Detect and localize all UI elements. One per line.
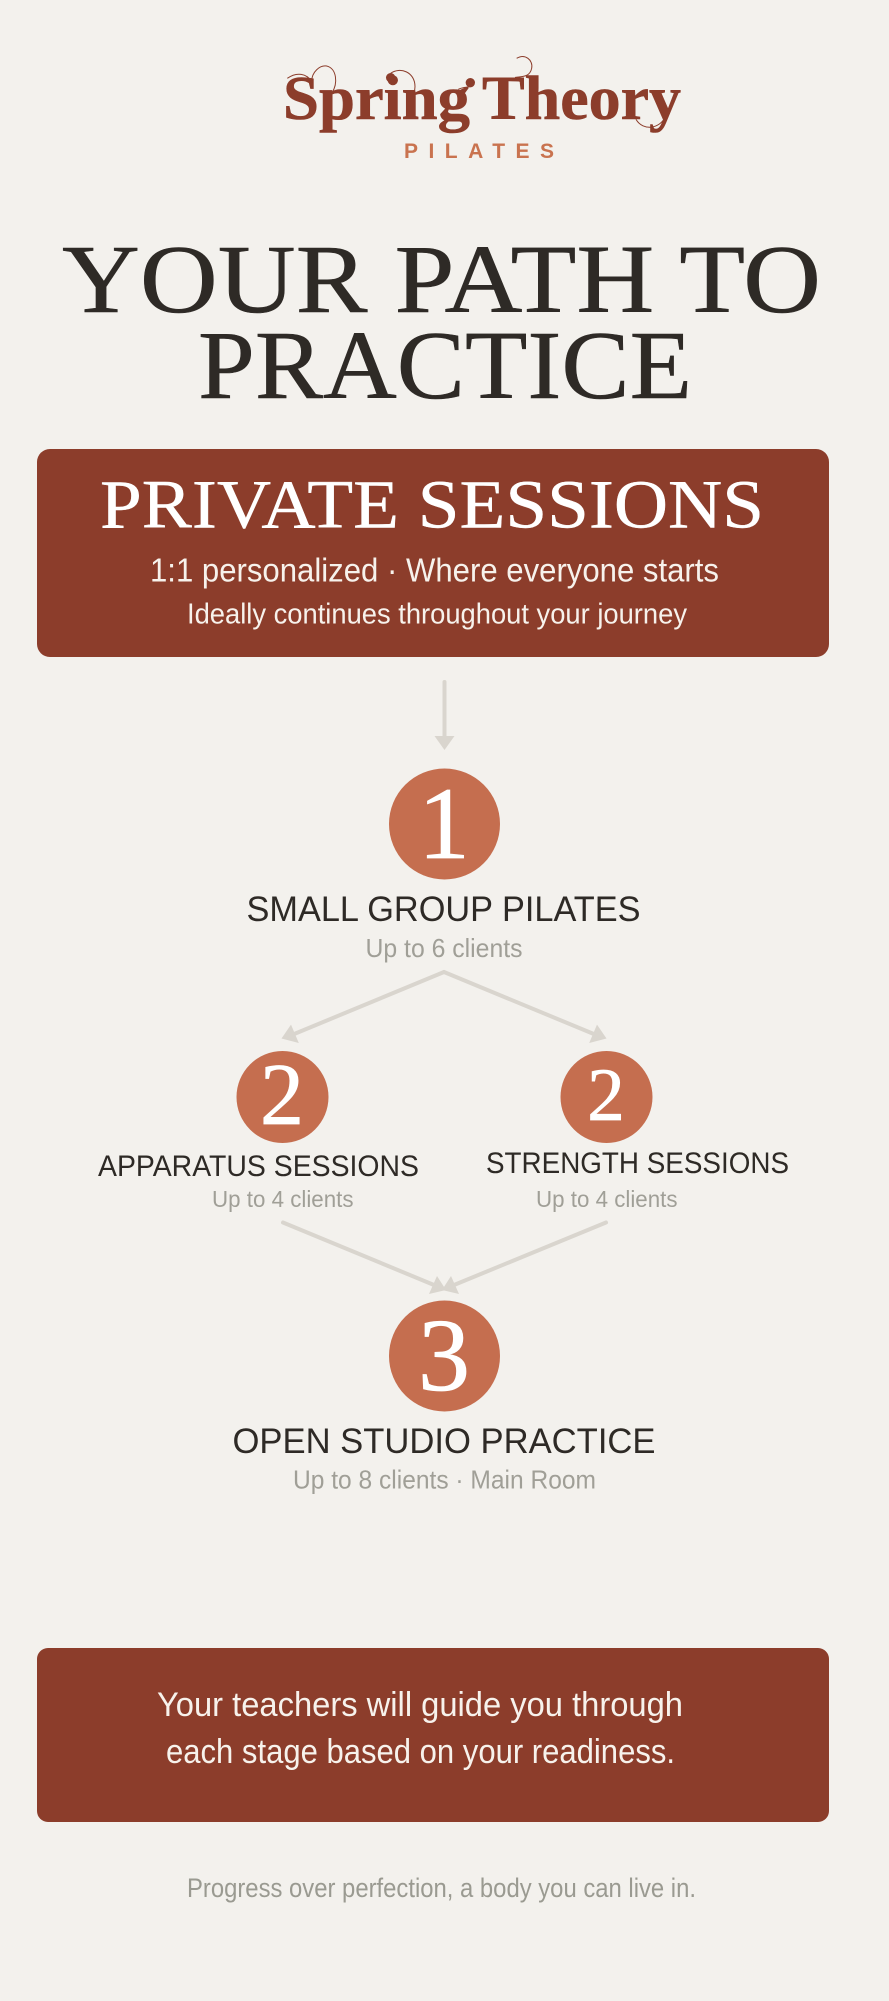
step 1 badge: 1 bbox=[418, 767, 470, 881]
step 1: small group pilates bbox=[246, 767, 640, 963]
arrow: apparatus sessions to step 3 bbox=[283, 1222, 446, 1294]
step 2: apparatus sessions bbox=[98, 1047, 419, 1212]
guidance text bbox=[157, 1686, 683, 1771]
title bbox=[62, 226, 821, 419]
apparatus label: APPARATUS SESSIONS bbox=[98, 1150, 419, 1183]
panel heading: PRIVATE SESSIONS bbox=[100, 466, 764, 542]
arrow: step 1 to apparatus sessions bbox=[282, 972, 444, 1043]
panel description: 1:1 personalized · Where everyone starts bbox=[150, 552, 719, 588]
step 3 badge bbox=[389, 1298, 500, 1413]
step 1 label: SMALL GROUP PILATES bbox=[246, 890, 640, 929]
step 3: open studio practice bbox=[232, 1298, 656, 1494]
logo: Spring Theory Pilates bbox=[283, 57, 681, 163]
apparatus capacity: Up to 4 clients bbox=[212, 1186, 354, 1212]
panel: private sessions bbox=[37, 449, 829, 657]
arrow: strength sessions to step 3 bbox=[442, 1222, 606, 1294]
step 3 label: OPEN STUDIO PRACTICE bbox=[232, 1422, 656, 1461]
apparatus badge: 2 bbox=[260, 1047, 304, 1144]
step 1 capacity: Up to 6 clients bbox=[366, 933, 522, 963]
step 3 capacity: Up to 8 clients · Main Room bbox=[293, 1464, 596, 1494]
logo wordmark bbox=[283, 57, 681, 133]
guidance text: each stage based on your readiness. bbox=[166, 1733, 675, 1771]
strength capacity: Up to 4 clients bbox=[536, 1186, 678, 1212]
step 1 badge bbox=[389, 767, 500, 881]
arrow: step 1 to strength sessions bbox=[444, 972, 606, 1043]
strength badge: 2 bbox=[587, 1054, 625, 1137]
panel: teacher guidance bbox=[37, 1648, 829, 1822]
apparatus badge bbox=[236, 1047, 328, 1144]
logo subtitle: PILATES bbox=[404, 140, 554, 163]
logo wordmark: Theory bbox=[482, 65, 681, 133]
guidance text: Your teachers will guide you through bbox=[157, 1686, 683, 1724]
step 2: strength sessions bbox=[486, 1051, 789, 1212]
strength badge bbox=[560, 1051, 652, 1143]
step 3 badge: 3 bbox=[418, 1298, 470, 1413]
title: YOUR PATH TO bbox=[62, 226, 821, 333]
panel note: Ideally continues throughout your journey bbox=[187, 598, 687, 630]
logo wordmark: Spring bbox=[283, 65, 470, 133]
arrow: private sessions to step 1 bbox=[434, 682, 454, 750]
footer tagline: Progress over perfection, a body you can live in. bbox=[187, 1873, 696, 1903]
title: PRACTICE bbox=[198, 312, 692, 419]
strength label: STRENGTH SESSIONS bbox=[486, 1147, 789, 1180]
